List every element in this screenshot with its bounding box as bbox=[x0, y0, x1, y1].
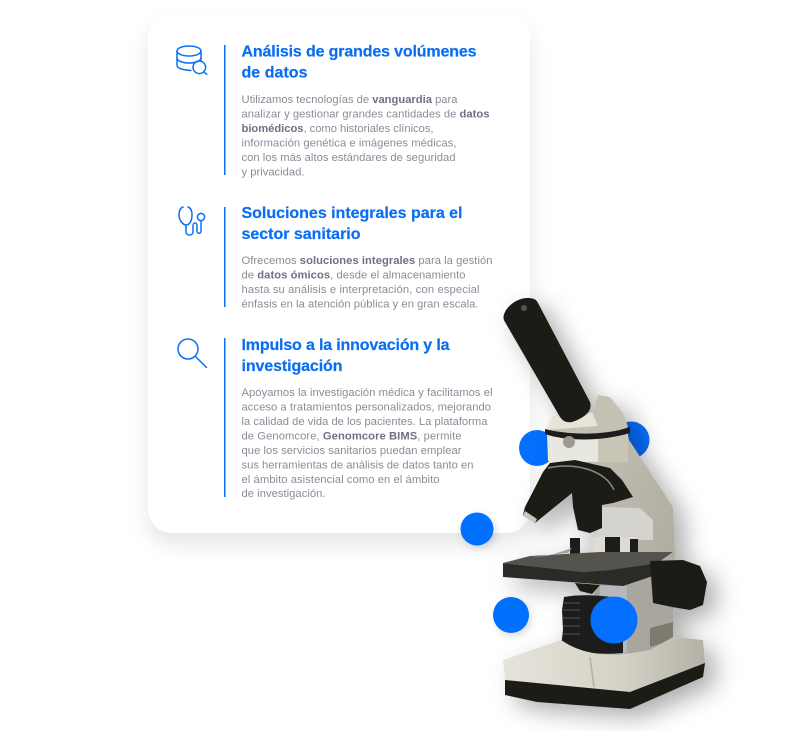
icon: magnifier bbox=[178, 339, 206, 368]
decorative blue dot left of microscope bbox=[493, 597, 529, 633]
body text: el ámbito asistencial como en el ámbito bbox=[242, 474, 440, 486]
section: integral solutions bbox=[179, 205, 492, 310]
decorative blue dot on microscope bbox=[590, 596, 638, 644]
body text: énfasis en la atención pública y en gran escala. bbox=[242, 298, 478, 310]
body text: que los servicios sanitarios puedan emplear bbox=[242, 445, 462, 457]
panel: content card bbox=[148, 15, 530, 533]
lower column bbox=[593, 572, 673, 655]
body text: Ofrecemos soluciones integrales para la gestión bbox=[242, 255, 492, 267]
divider line bbox=[224, 207, 226, 307]
heading: sector sanitario bbox=[242, 226, 361, 243]
body text: la calidad de vida de los pacientes. La plataforma bbox=[242, 416, 488, 428]
body text bbox=[242, 94, 490, 178]
body text bbox=[242, 387, 492, 500]
body text: y privacidad. bbox=[242, 166, 304, 178]
body text: analizar y gestionar grandes cantidades de datos bbox=[242, 108, 490, 120]
body text: con los más altos estándares de seguridad bbox=[242, 152, 456, 164]
body text: hasta su análisis e interpretación, con especial bbox=[242, 284, 480, 296]
slide holder bbox=[593, 537, 637, 553]
body text: biomédicos, como historiales clínicos, bbox=[242, 123, 434, 135]
nosepiece and objectives bbox=[523, 460, 633, 533]
body text bbox=[242, 255, 492, 310]
body text: de investigación. bbox=[242, 488, 326, 500]
base black band bbox=[505, 663, 705, 709]
body text: acceso a tratamientos personalizados, mejorando bbox=[242, 402, 491, 414]
body text: de Genomcore, Genomcore BIMS, permite bbox=[242, 430, 462, 442]
knob bbox=[563, 436, 575, 448]
divider line bbox=[224, 45, 226, 175]
dark band bbox=[545, 427, 630, 440]
focus knob bbox=[650, 560, 707, 610]
divider line bbox=[224, 338, 226, 497]
decorative blue dots behind microscope bbox=[519, 422, 650, 466]
body text: Utilizamos tecnologías de vanguardia para bbox=[242, 94, 458, 106]
section: big data analysis bbox=[177, 44, 490, 178]
arm bbox=[585, 395, 675, 650]
inner arm light area bbox=[596, 507, 653, 540]
section: innovation and research bbox=[178, 337, 492, 500]
heading: de datos bbox=[242, 64, 308, 82]
heading: Análisis de grandes volúmenes bbox=[242, 44, 477, 60]
body text: información genética e imágenes médicas, bbox=[242, 138, 456, 150]
heading: Soluciones integrales para el bbox=[242, 205, 462, 222]
icon: database with magnifier bbox=[177, 46, 207, 74]
head bbox=[547, 395, 628, 437]
base top bbox=[503, 637, 705, 692]
heading: Impulso a la innovación y la bbox=[242, 337, 450, 354]
icon: stethoscope bbox=[179, 207, 205, 235]
coil bbox=[561, 595, 623, 654]
body text: Apoyamos la investigación médica y facilitamos el bbox=[242, 387, 492, 399]
stage bbox=[503, 552, 673, 572]
decorative blue dot on card corner bbox=[460, 512, 494, 546]
eyepiece tube bbox=[504, 298, 591, 422]
illustration: microscope bbox=[503, 298, 707, 709]
body text: de datos ómicos, desde el almacenamiento bbox=[242, 270, 466, 282]
body text: sus herramientas de análisis de datos tanto en bbox=[242, 460, 474, 472]
heading: investigación bbox=[242, 358, 342, 375]
